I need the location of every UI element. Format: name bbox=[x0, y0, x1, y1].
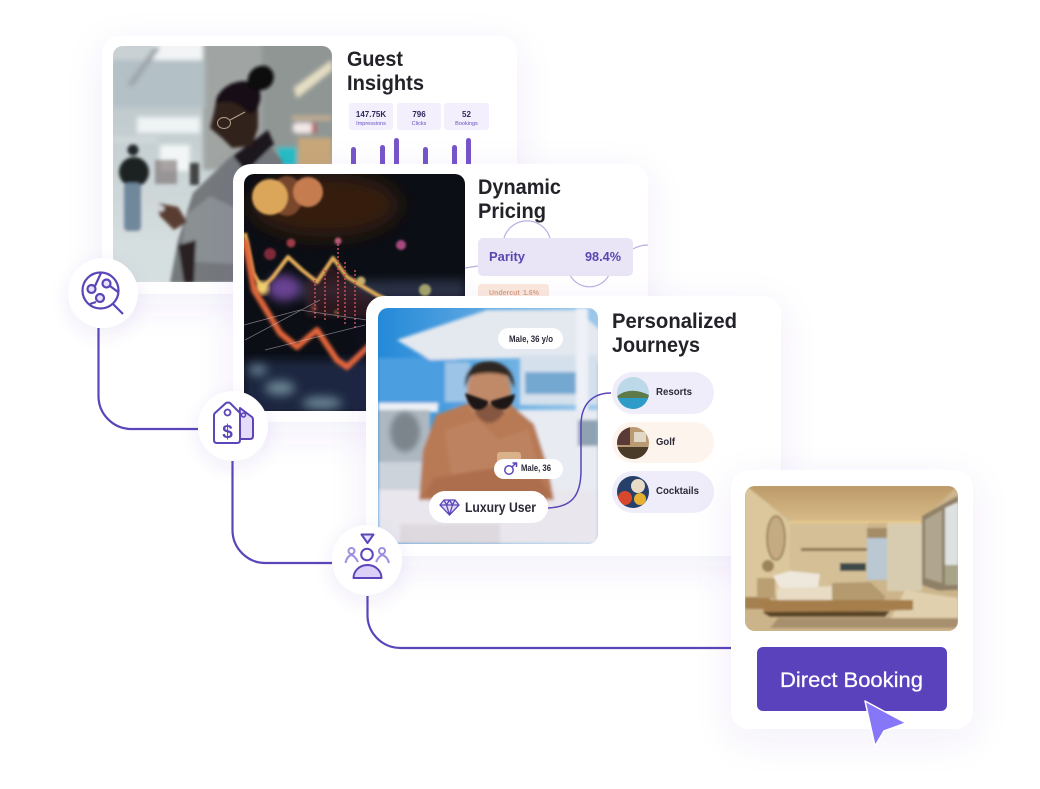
photo: woman using phone in terminal bbox=[105, 40, 338, 283]
icon: diamond bbox=[440, 500, 459, 515]
bar chart bbox=[351, 138, 471, 171]
stat tiles: 147.75K bbox=[356, 110, 386, 119]
panel: dynamic pricing bbox=[233, 164, 648, 422]
stat tiles: Clicks bbox=[412, 121, 427, 127]
stat tiles: 796 bbox=[412, 110, 426, 119]
photo: glowing price chart bbox=[244, 173, 465, 415]
pill: golf: Golf bbox=[656, 436, 675, 448]
panel: personalized journeys bbox=[366, 296, 781, 556]
step icon: price tags bbox=[198, 391, 268, 461]
heading bbox=[612, 309, 737, 357]
pill: cocktails: Cocktails bbox=[656, 485, 699, 497]
tag: male, 36 with gender icon bbox=[494, 459, 563, 479]
tag: male, 36 with gender icon: Male, 36 bbox=[521, 463, 551, 473]
connector: luxury user to resorts bbox=[548, 393, 611, 508]
heading bbox=[478, 175, 561, 223]
parity row bbox=[478, 238, 633, 276]
stat tiles: Impressions bbox=[356, 121, 386, 127]
tag: luxury user bbox=[429, 491, 548, 523]
pill: golf bbox=[612, 422, 714, 463]
pill: cocktails bbox=[612, 471, 714, 513]
undercut row bbox=[478, 284, 549, 296]
heading bbox=[347, 47, 424, 95]
heading: Journeys bbox=[612, 333, 700, 357]
panel: guest insights bbox=[102, 36, 517, 294]
tag: male, 36 y/o bbox=[498, 328, 563, 349]
icon: mouse cursor bbox=[865, 701, 906, 746]
connector lines between steps bbox=[98, 328, 732, 648]
stat tiles: Bookings bbox=[455, 121, 478, 127]
pill: resorts bbox=[612, 372, 714, 414]
heading: Guest bbox=[347, 47, 403, 71]
pill: resorts: Resorts bbox=[656, 386, 692, 398]
stat tiles bbox=[349, 103, 489, 130]
heading: Personalized bbox=[612, 309, 737, 333]
photo: man on sun lounger bbox=[378, 308, 600, 544]
tag: luxury user: Luxury User bbox=[465, 500, 537, 515]
decorative pricing arcs bbox=[465, 221, 648, 287]
undercut row: Undercut bbox=[489, 290, 520, 297]
heading: Dynamic bbox=[478, 175, 561, 199]
panel: direct booking bbox=[731, 470, 973, 746]
undercut row: 1.6% bbox=[523, 290, 540, 297]
step icon: audience group bbox=[332, 525, 402, 595]
photo: hotel suite bbox=[745, 485, 958, 631]
button: direct booking bbox=[757, 647, 947, 711]
heading: Pricing bbox=[478, 199, 546, 223]
step icon: guest insights magnifier bbox=[68, 258, 138, 328]
step icon: price tags: $ bbox=[222, 422, 233, 443]
parity row: 98.4% bbox=[585, 249, 621, 264]
button: direct booking: Direct Booking bbox=[780, 669, 923, 692]
heading: Insights bbox=[347, 71, 424, 95]
stat tiles: 52 bbox=[462, 110, 471, 119]
parity row: Parity bbox=[489, 249, 526, 264]
tag: male, 36 y/o: Male, 36 y/o bbox=[509, 334, 553, 344]
